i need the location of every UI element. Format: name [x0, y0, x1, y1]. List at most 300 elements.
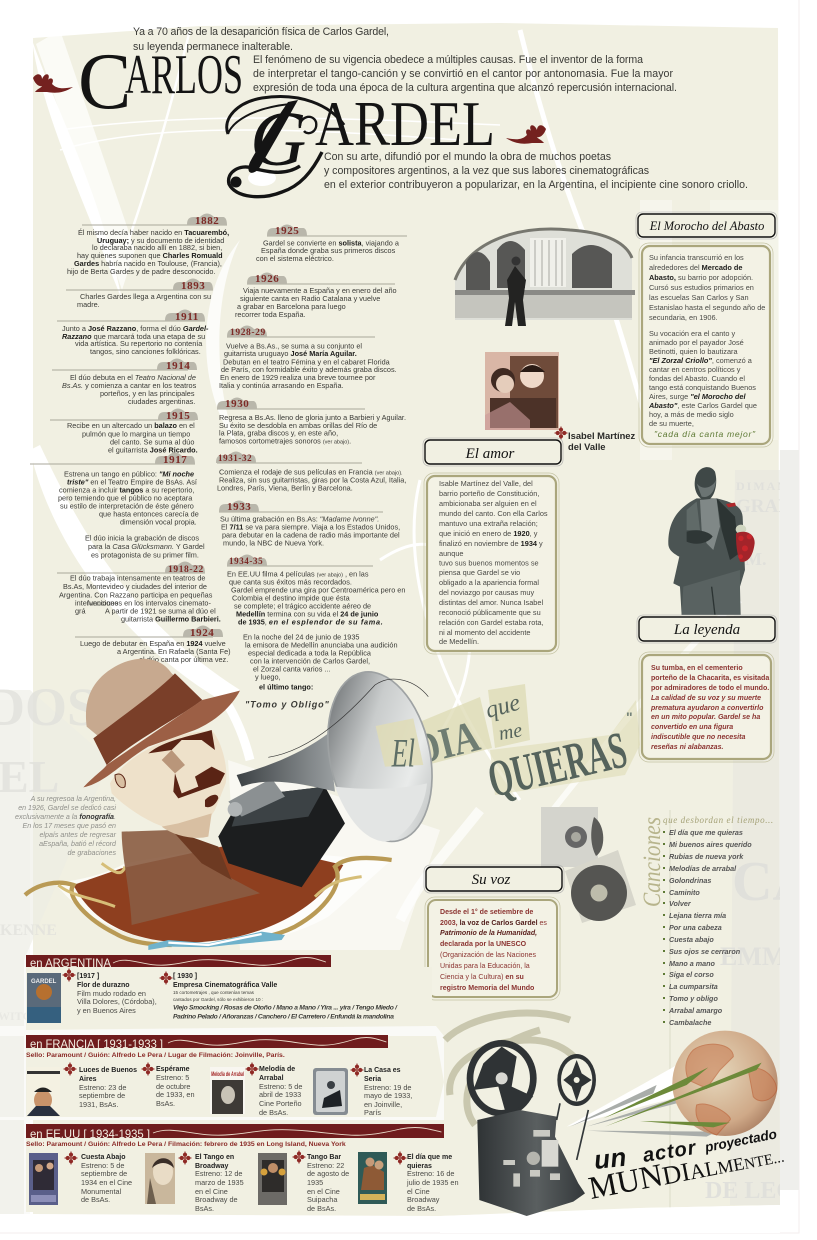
- photo: Mercado de Abasto and Gardel: [455, 229, 635, 326]
- 1934-35: 1934-35: [229, 556, 263, 566]
- entry 1917: [1917 ]: [77, 973, 99, 980]
- film: El día que me quieras: el Cine: [407, 1187, 430, 1196]
- light beams: [567, 1063, 717, 1137]
- 1924: [75, 626, 231, 664]
- film: El día que me quieras: [358, 1152, 459, 1213]
- 1882: lo declaraba nacido allí en 1882, si bien,: [92, 243, 222, 252]
- film: Luces de Buenos Aires: septiembre de: [79, 1091, 125, 1100]
- 1934-35: Gardel emprende una gira por Centroamérica pero en: [231, 586, 405, 594]
- credits: Sello: Paramount / Guión: Alfredo Le Pera / Filmación: febrero de 1935 en Long Island, Nueva York: [26, 1141, 346, 1148]
- 1931-32: Comienza el rodaje de sus películas en Francia (ver abajo).: [219, 468, 403, 476]
- 1882: [67, 214, 229, 276]
- panel: en EE.UU: [26, 1124, 459, 1213]
- film: El Tango en Broadway: El Tango en: [195, 1154, 234, 1161]
- heading: [637, 615, 777, 643]
- film: Espérame: Estreno: 5: [156, 1073, 189, 1082]
- newspaper ghost text: DIMAN: [736, 479, 788, 493]
- box: reconoció públicamente que su: [439, 608, 541, 617]
- credits: Sello: Paramount / Guión: Alfredo Le Pera / Lugar de Filmación: Joinville, París.: [26, 1052, 285, 1059]
- entry 1917: Film mudo rodado en: [77, 989, 146, 998]
- film: Melodía de Arrabal: abril de 1933: [259, 1090, 301, 1099]
- caption: fonografía: elpaís antes de regresar: [39, 831, 117, 839]
- 1924: el dúo canta por última vez.: [139, 655, 228, 664]
- entry 1930: 15 cortometrajes , que contenían temas: [173, 990, 255, 995]
- box: del noviazgo por causas muy: [439, 588, 534, 597]
- collage title: El día que me quieras: que: [483, 690, 523, 724]
- list: Canciones: Arrabal amargo: [668, 1006, 723, 1015]
- 1928-29: [219, 326, 397, 390]
- 1914: El dúo debuta en el Teatro Nacional de: [70, 373, 196, 382]
- 1915: Recibe en un altercado un balazo en el: [67, 421, 195, 430]
- green streaks: [603, 1063, 762, 1127]
- box: declarada por la UNESCO: [440, 941, 527, 948]
- 1928-29: En enero de 1929 realiza una breve tournee por: [220, 373, 376, 382]
- heading: [636, 212, 777, 239]
- 1911: vida artística. Su repertorio no contenía: [75, 339, 203, 348]
- 1930: [217, 398, 406, 446]
- film: Espérame: BsAs.: [156, 1099, 175, 1108]
- 1917: triste" en el Teatro Empire de BsAs. Así: [67, 478, 197, 486]
- banner: en ARGENTINA: [30, 956, 111, 970]
- film: Tango Bar: de agosto de: [307, 1169, 349, 1178]
- box: Su tumba, en el cementerio: [651, 665, 743, 672]
- title: Gardel: [227, 89, 495, 197]
- globe: [672, 1031, 778, 1136]
- box: piensa que Gardel se vio: [439, 568, 520, 577]
- film: Melodía de Arrabal: Melodía de: [259, 1066, 295, 1073]
- 1914: ciudades argentinas.: [128, 397, 195, 406]
- box: [425, 897, 560, 1000]
- film: Tango Bar: de BsAs.: [307, 1204, 336, 1213]
- 1934-35: se complete; el trágico accidente aéreo de: [234, 602, 371, 610]
- icon: flourish left: [33, 74, 73, 93]
- body: [477, 1110, 585, 1216]
- 1928-29: 1928-29: [230, 328, 266, 338]
- panel: El Morocho del Abasto: [636, 212, 777, 447]
- 1914: Bs.As. y comienza a cantar en los teatros: [62, 381, 197, 390]
- 1924: Luego de debutar en España en 1924 vuelve: [80, 639, 226, 648]
- entry 1917: [62, 968, 157, 1015]
- newspaper ghost text: GRAN: [736, 496, 792, 517]
- swirl behind projector: [445, 1013, 586, 1125]
- heading: El amor: [465, 446, 515, 462]
- newspaper ghost text: [0, 479, 813, 1204]
- 1930: 1930: [225, 398, 249, 410]
- film: Cuesta Abajo: Monumental: [81, 1187, 122, 1196]
- 1933: [219, 500, 400, 548]
- 1934-35: el Zorzal canta varios ...: [253, 664, 330, 674]
- box: convertido en una figura: [651, 724, 733, 731]
- box: Patrimonio de la Humanidad,: [440, 930, 537, 937]
- box: [639, 243, 773, 447]
- bust: [122, 830, 260, 925]
- 1925: con el sistema eléctrico.: [256, 254, 334, 263]
- poster: [27, 973, 61, 1023]
- film: Cuesta Abajo: de BsAs.: [81, 1195, 110, 1204]
- 1918-22: guitarrista Guillermo Barbieri.: [121, 614, 221, 624]
- 1933: Su última grabación en Bs.As: "Madame Ivonne".: [220, 514, 379, 524]
- 1931-32: 1931-32: [218, 453, 252, 463]
- illustration: gramophone: El: [391, 731, 415, 776]
- 1934-35: que canta sus éxitos más recordados.: [229, 578, 352, 586]
- film: Melodía de Arrabal: Arrabal: [259, 1075, 284, 1082]
- caption: fonografía: A su regresoa la Argentina,: [30, 795, 116, 803]
- box: "cada día canta mejor": [654, 429, 756, 439]
- 1925: [256, 224, 407, 263]
- intro text: en el exterior contribuyeron a popularizar, en la Argentina, el incipiente cine sonoro criollo.: [324, 179, 748, 191]
- entry 1917: Villa Dolores, (Córdoba),: [77, 997, 157, 1006]
- box: Betinotti, quien lo bautizara: [649, 347, 739, 356]
- film: Luces de Buenos Aires: [27, 1062, 137, 1116]
- 1882: hay quienes suponen que Charles Romuald: [77, 251, 223, 260]
- film: Tango Bar: [258, 1150, 349, 1213]
- heading: [423, 438, 563, 466]
- collage title: El día que me quieras: QUIERAS: [483, 722, 632, 809]
- film: La Casa es Seria: París: [364, 1108, 381, 1117]
- film: Espérame: de octubre: [156, 1082, 190, 1091]
- box: de Medellín.: [439, 637, 479, 646]
- box: hoy, a más de medio siglo: [649, 410, 734, 419]
- 1917: es protagonista de su primer film.: [91, 550, 199, 560]
- 1926: Viaja nuevamente a España y en enero del año: [243, 286, 397, 295]
- film: El día que me quieras: Broadway: [407, 1195, 440, 1204]
- list: Canciones: Caminito: [669, 888, 700, 897]
- slogan: un actor proyectado mundialmente: un: [592, 1142, 628, 1175]
- 1931-32: Realiza, sin sus guitarristas, giras por la Costa Azul, Italia,: [219, 476, 406, 484]
- heading: La leyenda: [673, 622, 740, 638]
- 1928-29: guitarrista uruguayo José María Aguilar.: [224, 349, 357, 358]
- caption: fonografía: en 1926, Gardel se dedicó casi: [18, 804, 116, 812]
- title: Carlos: [78, 38, 243, 126]
- 1934-35: con la intervención de Carlos Gardel,: [250, 656, 370, 666]
- 1915: pulmón que lo margina un tiempo: [82, 430, 190, 438]
- film: Tango Bar: Estreno: 22: [307, 1161, 344, 1170]
- list: Canciones: Siga el corso: [669, 970, 714, 979]
- 1917: El dúo inicia la grabación de discos: [85, 534, 199, 542]
- 1911: [57, 310, 209, 356]
- 1882: Él mismo decía haber nacido en Tacuarembó,: [78, 228, 229, 237]
- film: Cuesta Abajo: septiembre de: [81, 1169, 127, 1178]
- box: [639, 652, 774, 762]
- film: Tango Bar: en el Cine: [307, 1187, 340, 1196]
- box: las escuelas San Carlos y San: [649, 293, 749, 302]
- 1934-35: de 1935, en el esplendor de su fama.: [238, 618, 383, 626]
- list: Canciones: [639, 815, 774, 1027]
- caption: fonografía: de grabaciones: [67, 849, 116, 857]
- film: El Tango en Broadway: BsAs.: [195, 1204, 214, 1213]
- records: [541, 807, 636, 923]
- 1933: 1933: [227, 501, 251, 513]
- box: Isable Martínez del Valle, del: [439, 479, 533, 488]
- banner: [26, 1124, 444, 1141]
- film: Cuesta Abajo: Estreno: 5 de: [81, 1161, 124, 1170]
- collage title: El día que me quieras: DIA: [409, 711, 485, 775]
- entry 1917: y en Buenos Aires: [77, 1006, 136, 1015]
- film: La Casa es Seria: en Joinville,: [364, 1100, 402, 1109]
- 1917: para la Casa Glücksmann. Y Gardel: [88, 542, 205, 551]
- 1882: Uruguay; y su documento de identidad: [97, 236, 224, 245]
- illustration: gramophone: [218, 662, 447, 887]
- 1928-29: Debutan en el teatro Fémina y en el cabaret Florida: [223, 358, 391, 366]
- 1918-22: grá: [75, 606, 86, 616]
- box: por admiradores de todo el mundo.: [651, 685, 769, 692]
- film: El día que me quieras: quieras: [407, 1163, 432, 1170]
- 1918-22: El dúo trabaja intensamente en teatros de: [70, 574, 206, 582]
- 1911: Razzano que marcará toda una etapa de su: [62, 332, 205, 341]
- 1915: [50, 408, 198, 454]
- film: Tango Bar: 1935: [307, 1178, 323, 1187]
- 1928-29: Vuelve a Bs.As., se suma a su conjunto el: [226, 342, 362, 350]
- film: La Casa es Seria: Seria: [364, 1076, 381, 1083]
- film: Luces de Buenos Aires: 1931, BsAs.: [79, 1100, 118, 1109]
- 1915: del canto. Se suma al dúo: [110, 438, 194, 446]
- shield: [25, 847, 392, 950]
- banner: en FRANCIA [ 1931-1933 ]: [30, 1037, 163, 1051]
- film: Cuesta Abajo: [29, 1152, 132, 1205]
- panel: El amor: [423, 438, 563, 654]
- film: Espérame: [142, 1062, 195, 1108]
- box: Ciencia y la Cultura) en su: [440, 974, 524, 981]
- photo caption: del Valle: [568, 441, 606, 452]
- box: Su vocación era el canto y: [649, 329, 735, 338]
- panel: en Argentina: [26, 955, 432, 1030]
- 1933: para debutar en la cadena de radio más importante del: [222, 530, 400, 540]
- photo: statue of Gardel: [668, 467, 755, 615]
- timeline column 1: [30, 214, 231, 664]
- 1934-35: "Tomo y Obligo": [245, 700, 330, 710]
- 1934-35: En EE.UU filma 4 películas (ver abajo) , en las: [227, 570, 369, 578]
- 1926: 1926: [255, 273, 279, 285]
- caption: fonografía: aEspaña, batió el récord: [39, 840, 117, 848]
- 1911: 1911: [175, 311, 199, 323]
- film: El día que me quieras: Estreno: 16 de: [407, 1169, 454, 1178]
- box: mantuvo una extraña relación;: [439, 519, 538, 528]
- entry 1930: cantados por Gardel, sólo se exhibieron 10 :: [173, 997, 263, 1002]
- box: relación con Gardel estaba rota,: [439, 618, 544, 627]
- title: Gardel: G: [250, 95, 306, 182]
- 1930: famosos cortometrajes sonoros (ver abajo).: [219, 436, 351, 446]
- 1917: comienza a incluir tangos a su repertorio,: [59, 486, 194, 494]
- 1914: porteños, y en las principales: [100, 389, 195, 398]
- 1917: su estilo de interpretación de éste género: [60, 502, 194, 510]
- list: Canciones: Lejana tierra mía: [669, 911, 726, 920]
- film: Espérame: Espérame: [156, 1066, 190, 1073]
- 1917: Estrena un tango en público: "Mi noche: [64, 470, 194, 478]
- film: El día que me quieras: de BsAs.: [407, 1204, 436, 1213]
- 1882: 1882: [195, 215, 219, 227]
- 1925: 1925: [275, 225, 299, 237]
- illustration: projector: [467, 1031, 778, 1216]
- poster: GARDEL: [31, 979, 57, 985]
- slogan: un actor proyectado mundialmente: MUNDIALMENTE...: [585, 1133, 786, 1206]
- film: Tango Bar: Tango Bar: [307, 1154, 341, 1161]
- caption: fonografía: En los 17 meses que pasó en: [23, 822, 116, 830]
- 1931-32: [216, 452, 406, 492]
- box: "El Zorzal Criollo", comenzó a: [649, 356, 753, 365]
- list: Canciones: Canciones: [639, 817, 666, 907]
- 1893: [66, 278, 213, 309]
- 1930: Regresa a Bs.As. lleno de gloria junto a Barbieri y Aguilar.: [219, 413, 406, 422]
- 1934-35: Medellín termina con su vida el 24 de junio: [236, 610, 379, 618]
- 1882: hijo de Berta Gardes y de padre desconocido.: [67, 267, 215, 276]
- 1926: [235, 272, 397, 319]
- film: El día que me quieras: El día que me: [407, 1154, 452, 1161]
- 1934-35: la emisora de Medellín anunciaba una audición: [245, 640, 398, 650]
- box: indiscutible que no necesita: [651, 734, 745, 741]
- photo caption: [554, 426, 636, 452]
- entry 1930: [160, 972, 398, 1020]
- list: Canciones: Tomo y obligo: [669, 994, 718, 1003]
- 1911: tangos, sino canciones folklóricas.: [90, 347, 201, 356]
- 1918-22: [57, 562, 221, 624]
- 1918-22: 1918-22: [168, 565, 204, 575]
- icon: flourish right: [506, 125, 546, 144]
- box: en un mito popular. Gardel se ha: [651, 714, 760, 721]
- film: Tango Bar: Suipacha: [307, 1195, 338, 1204]
- 1882: Gardes habría nacido en Toulouse, (Francia),: [74, 259, 222, 268]
- list: Canciones: Mano a mano: [669, 959, 716, 968]
- banner: [26, 1035, 388, 1051]
- film: Cuesta Abajo: Cuesta Abajo: [81, 1154, 125, 1161]
- box: Unidas para la Educación, la: [440, 963, 530, 970]
- film: La Casa es Seria: La Casa es: [364, 1067, 401, 1074]
- list: Canciones: Volver: [669, 899, 692, 908]
- face: [110, 730, 226, 831]
- list: Canciones: Cambalache: [669, 1018, 711, 1027]
- 1933: El 7/11 se va para siempre. Viaja a los Estados Unidos,: [221, 522, 400, 532]
- collage title: El día que me quieras: me: [497, 719, 524, 745]
- box: de su muerte,: [649, 419, 694, 428]
- entry 1930: Empresa Cinematográfica Valle: [173, 982, 277, 989]
- film: El Tango en Broadway: Broadway: [195, 1163, 229, 1170]
- 1914: 1914: [166, 360, 190, 372]
- film: Melodía de Arrabal: de BsAs.: [259, 1108, 288, 1117]
- 1933: mundo, la NBC de Nueva York.: [223, 538, 324, 548]
- list: Canciones: Por una cabeza: [669, 923, 722, 932]
- box: aunque: [439, 549, 464, 558]
- title: Carlos: C: [78, 38, 131, 126]
- box: La calidad de su voz y su muerte: [651, 695, 761, 702]
- 1918-22: A partir de 1921 se suma al dúo el: [105, 606, 216, 616]
- 1930: Su éxito se desdobla en ambas orillas del Río de: [219, 421, 377, 430]
- box: Cursó sus estudios primarios en: [649, 283, 754, 292]
- box: obligado a la apariencia formal: [439, 578, 539, 587]
- entry 1917: Flor de durazno: [77, 982, 130, 989]
- film: Cuesta Abajo: 1934 en el Cine: [81, 1178, 132, 1187]
- 1893: madre.: [77, 300, 100, 309]
- 1934-35: En la noche del 24 de junio de 1935: [243, 632, 359, 642]
- intro text: expresión de toda una época de la cultura argentina que alcanzó repercusión internacional.: [253, 82, 677, 94]
- 1926: siguiente canta en Radio Catalana y vuelve: [240, 294, 380, 303]
- hat: [86, 659, 202, 750]
- 1918-22: Argentina. Con Razzano participa en pequeñas: [59, 590, 213, 600]
- intro text: su leyenda permanece inalterable.: [133, 41, 293, 53]
- box: finalizó en noviembre de 1934 y: [439, 539, 543, 548]
- collage title: El día que me quieras: [400, 684, 640, 809]
- 1917: que hasta entonces carecía de: [99, 510, 199, 518]
- box: Desde el 1° de setiembre de: [440, 908, 533, 916]
- list: Canciones: La cumparsita: [669, 982, 718, 991]
- title: Carlos: ARLOS: [125, 44, 243, 106]
- 1934-35: [227, 554, 405, 710]
- film: El Tango en Broadway: Broadway de: [195, 1195, 238, 1204]
- intro text: Ya a 70 años de la desaparición física de Carlos Gardel,: [133, 26, 389, 38]
- 1931-32: Londres, París, Viena, Berlín y Barcelona.: [217, 484, 353, 492]
- entry 1930: [ 1930 ]: [173, 973, 197, 980]
- 1934-35: Colombia el destino impide que ésta: [232, 594, 351, 602]
- heading: Su voz: [472, 872, 511, 888]
- list: Canciones: Rubias de nueva york: [669, 852, 744, 861]
- panel: La leyenda: [637, 615, 777, 762]
- intro text: de interpretar el tango-canción y se convirtió en el cantor por antonomasia. Fue la mayor: [253, 68, 673, 80]
- film: Luces de Buenos Aires: Estreno: 23 de: [79, 1083, 126, 1092]
- 1915: 1915: [166, 410, 190, 422]
- box: registro Memoria del Mundo: [440, 985, 535, 992]
- film: El Tango en Broadway: en el Cine: [195, 1187, 228, 1196]
- film: Espérame: de 1933, en: [156, 1090, 195, 1099]
- 1926: a grabar en Barcelona para luego: [237, 302, 346, 311]
- slogan: un actor proyectado mundialmente: actor: [641, 1137, 698, 1167]
- film: El Tango en Broadway: [145, 1152, 244, 1213]
- box: ambicionaba ser alguien en el: [439, 499, 537, 508]
- box: tango está conquistando Buenos: [649, 383, 756, 392]
- box: Abasto, su barrio por adopción.: [649, 273, 753, 282]
- box: Aires, surge "el Morocho del: [649, 392, 746, 401]
- 1928-29: Italia y continúa arrasando en España.: [219, 381, 344, 390]
- box: animado por el payador José: [649, 338, 744, 347]
- 1924: 1924: [190, 627, 214, 639]
- box: (Organización de las Naciones: [440, 952, 536, 959]
- slogan: un actor proyectado mundialmente: proyectado: [703, 1126, 778, 1155]
- 1917: 1917: [163, 454, 187, 466]
- 1926: recorrer toda España.: [235, 310, 306, 319]
- film: Melodía de Arrabal: [210, 1062, 302, 1117]
- film: Melodía de Arrabal: Estreno: 5 de: [259, 1082, 302, 1091]
- panel: Su voz: [424, 865, 564, 1000]
- 1924: a Argentina. En Rafaela (Santa Fe): [117, 647, 231, 656]
- box: 2003, la voz de Carlos Gardel es: [440, 920, 547, 927]
- box: reseñas ni alabanzas.: [651, 744, 724, 751]
- 1934-35: el último tango:: [259, 682, 313, 692]
- 1915: el guitarrista José Ricardo.: [108, 446, 198, 454]
- caption: fonografía: [15, 795, 117, 857]
- box: distintas del amor. Nunca Isabel: [439, 598, 543, 607]
- box: Estanislao hasta el segundo año de: [649, 303, 765, 312]
- 1930: la Plata, graba discos y, en este año,: [219, 428, 338, 438]
- heading: El Morocho del Abasto: [649, 219, 764, 233]
- intro text: El fenómeno de su vigencia obedece a múltiples causas. Fue el inventor de la forma: [253, 54, 643, 66]
- intro text: y compositores argentinos, a la vez que sus labores cinematográficas: [324, 165, 649, 177]
- 1917: pero temiendo que el público no aceptara: [58, 494, 193, 502]
- 1925: España donde graba sus primeros discos: [261, 246, 396, 255]
- newspaper ghost text: DE LEO: [705, 1178, 795, 1204]
- box: fondas del Abasto. Cuando el: [649, 374, 745, 383]
- list: Canciones: Melodías de arrabal: [669, 864, 737, 873]
- box: ni al momento del accidente: [439, 628, 530, 637]
- 1893: Charles Gardes llega a Argentina con su: [80, 292, 211, 301]
- film: El día que me quieras: julio de 1935 en: [406, 1178, 459, 1187]
- list: Canciones: Mi buenos aires querido: [669, 840, 752, 849]
- film: El Tango en Broadway: Estreno: 12 de: [195, 1169, 242, 1178]
- box: que inició en enero de 1920, y: [439, 529, 538, 538]
- photo: Isabel Martínez del Valle: [485, 352, 559, 430]
- list: Canciones: que desbordan el tiempo...: [663, 815, 774, 825]
- film: Melodía de Arrabal: Cine Porteño: [259, 1099, 302, 1108]
- banner: [26, 955, 331, 970]
- 1918-22: funciones: [87, 598, 119, 608]
- photo caption: Isabel Martínez: [568, 430, 636, 441]
- banner: en EE.UU [ 1934-1935 ]: [30, 1127, 150, 1141]
